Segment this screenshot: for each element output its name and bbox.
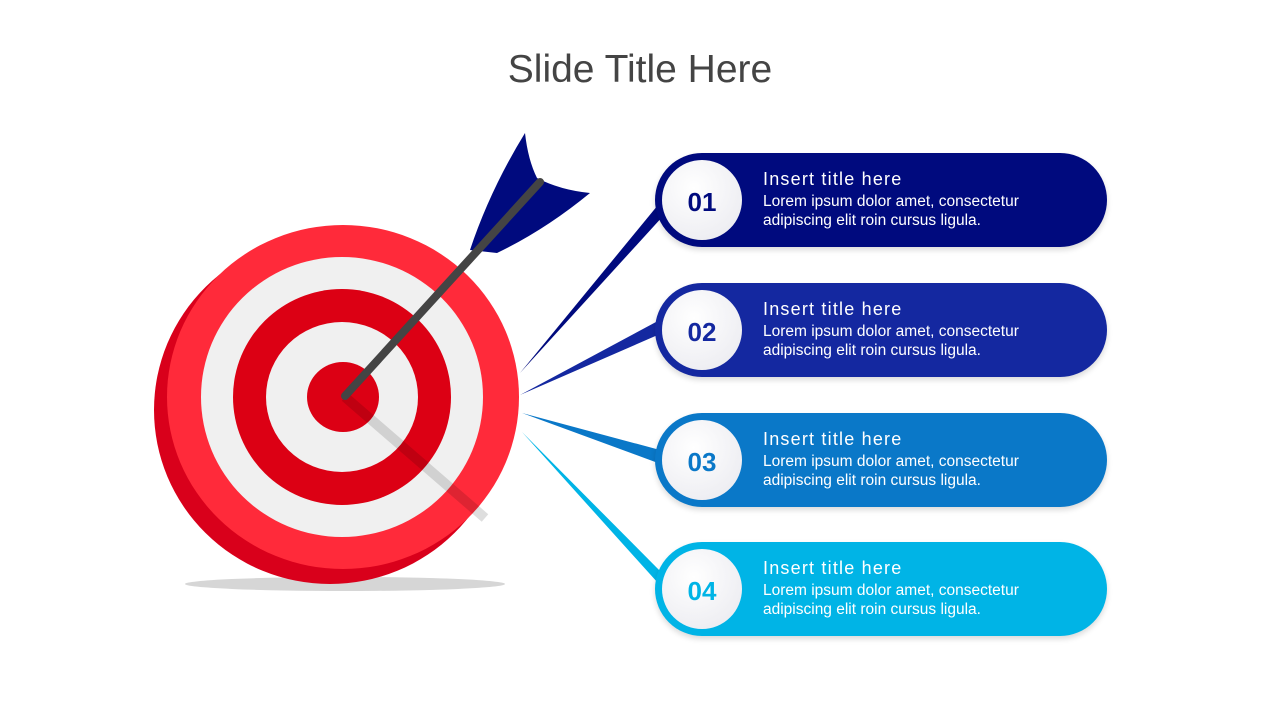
item 02	[655, 283, 1107, 377]
target shadow	[185, 577, 505, 591]
item 01: Insert title here	[763, 169, 902, 189]
item 03	[655, 413, 1107, 507]
item 04: 04	[688, 576, 716, 606]
item 02: Lorem ipsum dolor amet, consectetur	[763, 323, 1019, 340]
item 04: Lorem ipsum dolor amet, consectetur	[763, 582, 1019, 599]
item 01: adipiscing elit roin cursus ligula.	[763, 212, 981, 229]
item 01: 01	[688, 187, 716, 217]
item 02: adipiscing elit roin cursus ligula.	[763, 342, 981, 359]
dart	[345, 133, 590, 396]
target	[154, 225, 519, 584]
item 01	[655, 153, 1107, 247]
item 03: 03	[688, 447, 716, 477]
item 04: adipiscing elit roin cursus ligula.	[763, 601, 981, 618]
item 02: Insert title here	[763, 299, 902, 319]
item 03: Lorem ipsum dolor amet, consectetur	[763, 453, 1019, 470]
title: Slide Title Here	[508, 48, 772, 91]
item 02: 02	[688, 317, 716, 347]
connector lines	[520, 205, 664, 583]
item 01: Lorem ipsum dolor amet, consectetur	[763, 193, 1019, 210]
item 03: Insert title here	[763, 429, 902, 449]
item 03: adipiscing elit roin cursus ligula.	[763, 472, 981, 489]
item 04	[655, 542, 1107, 636]
item 04: Insert title here	[763, 558, 902, 578]
